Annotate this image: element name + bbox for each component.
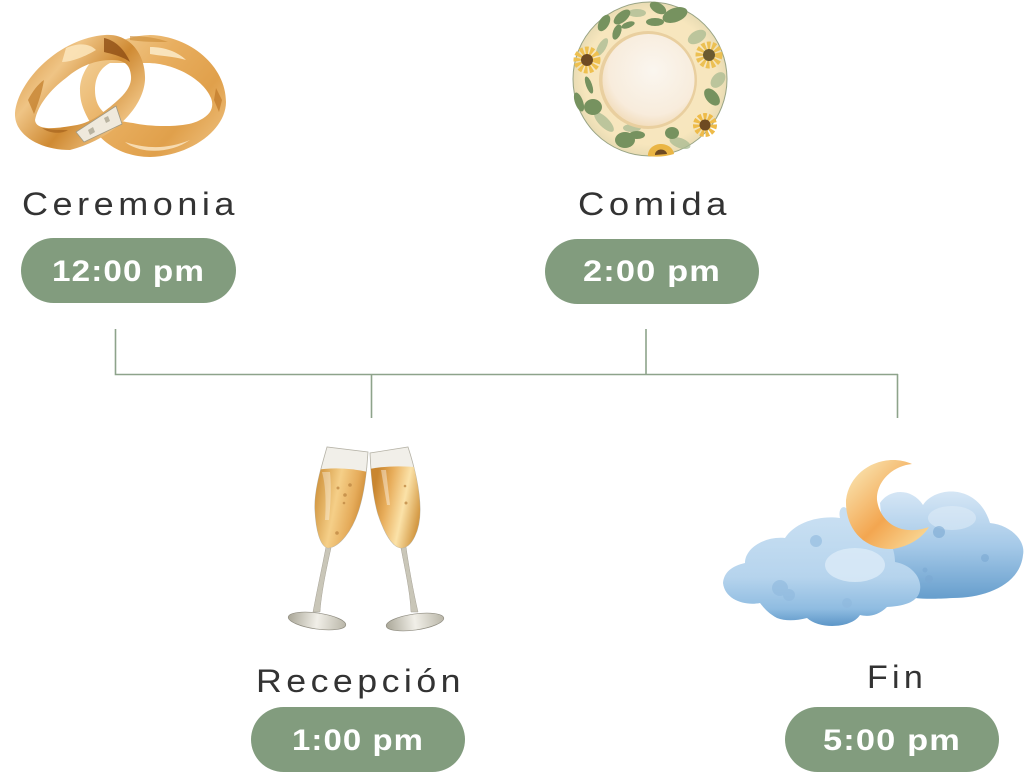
event: Ceremonia: [15, 35, 239, 303]
time pill: 5:00 pm: 5:00 pm: [823, 724, 961, 757]
event: Fin: [723, 460, 1023, 772]
icon: sunflower plate: [572, 0, 728, 157]
left glass stem and foot: [287, 547, 347, 633]
event: Recepción: [251, 447, 465, 772]
icon: moon and clouds: [723, 460, 1023, 626]
sunflower: [578, 51, 596, 69]
connector lines: [116, 329, 898, 418]
time pill: 1:00 pm: [251, 707, 465, 772]
right glass stem and foot: [385, 547, 445, 634]
time pill: 2:00 pm: 2:00 pm: [583, 255, 721, 288]
right glass bowl: [370, 446, 420, 548]
label: Fin: Fin: [867, 659, 927, 695]
time pill: 1:00 pm: 1:00 pm: [292, 724, 424, 757]
left glass bowl: [314, 446, 368, 548]
left cloud: [723, 507, 920, 626]
icon: champagne glasses: [287, 447, 445, 634]
label: Recepción: Recepción: [256, 663, 465, 699]
sunflower: [648, 144, 674, 157]
event: Comida: [545, 0, 759, 304]
crescent moon: [846, 460, 929, 549]
label: Comida: Comida: [578, 186, 731, 222]
time pill: 5:00 pm: [785, 707, 999, 772]
sunflower: [697, 117, 713, 133]
time pill: 12:00 pm: [21, 238, 236, 303]
time pill: 2:00 pm: [545, 239, 759, 304]
label: Ceremonia: Ceremonia: [22, 186, 239, 222]
sunflower: [700, 46, 718, 64]
diamonds band: [76, 106, 122, 142]
icon: wedding rings: [15, 35, 226, 157]
time pill: 12:00 pm: 12:00 pm: [52, 255, 205, 288]
right cloud: [880, 492, 1023, 599]
